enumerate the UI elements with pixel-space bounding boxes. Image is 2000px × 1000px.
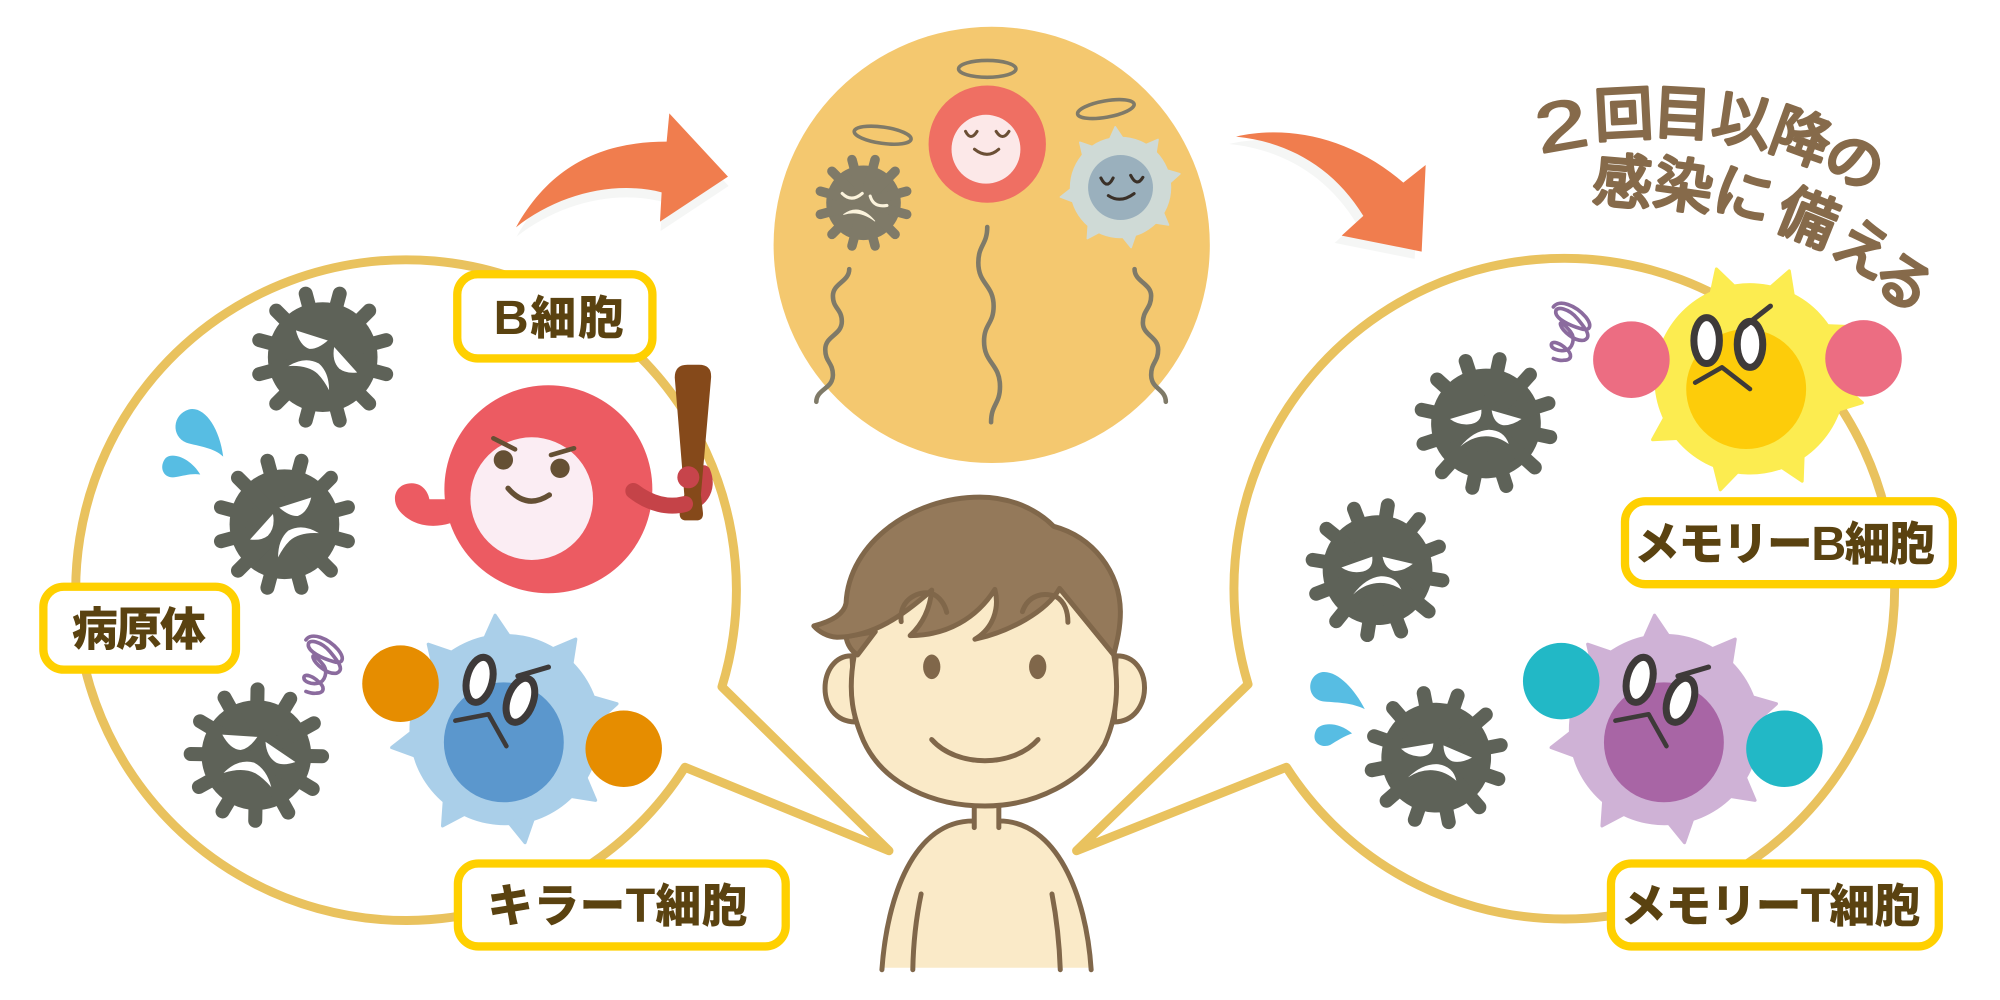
eyes <box>494 450 570 478</box>
curved title: 2 <box>1529 84 1594 168</box>
face <box>1694 306 1770 389</box>
ghost tails <box>816 227 1166 422</box>
nucleus <box>1686 329 1806 449</box>
curved title <box>1529 80 1945 326</box>
label: B cell <box>457 274 652 358</box>
virus 2 <box>1308 500 1447 640</box>
left speech bubble <box>76 260 889 921</box>
nucleus <box>1604 682 1724 802</box>
B cell right arm and hand <box>633 466 699 506</box>
curved title: に <box>1707 157 1780 235</box>
ghost virus <box>820 160 907 246</box>
right arrow <box>1229 132 1426 259</box>
curved title: え <box>1821 207 1905 292</box>
bat <box>675 365 711 520</box>
ghost T cell <box>1059 126 1181 249</box>
mouth <box>932 740 1038 761</box>
label: memory T cell <box>1611 864 1939 946</box>
curved title: 感 <box>1590 148 1654 218</box>
memory T cell character <box>1523 614 1823 845</box>
virus 2 <box>221 461 348 588</box>
body <box>444 385 652 593</box>
right speech bubble <box>1077 258 1895 919</box>
pathogen viruses, left <box>179 294 386 832</box>
left arrow <box>516 113 729 237</box>
label: memory B cell <box>1625 501 1953 584</box>
sweat drops, right <box>1310 672 1365 746</box>
halo: left <box>853 123 912 147</box>
label: pathogen <box>43 587 236 670</box>
cell body <box>1549 614 1779 845</box>
sweat drops, left <box>162 409 223 477</box>
face <box>455 654 548 746</box>
curved title: 降 <box>1762 98 1839 179</box>
ears <box>825 656 1145 722</box>
eyes <box>923 655 1046 679</box>
fists <box>1593 320 1902 398</box>
virus 1 <box>259 294 386 421</box>
killer T cell character <box>362 614 662 845</box>
nucleus <box>444 682 564 802</box>
virus 3 <box>179 678 333 832</box>
brows and smile <box>493 438 574 455</box>
boy character <box>814 497 1145 970</box>
label: memory T cell: メモリーT細胞 <box>1621 879 1920 933</box>
curved title: 以 <box>1708 85 1777 159</box>
curved title: の <box>1814 121 1895 205</box>
curved title: 染 <box>1650 151 1717 223</box>
virus 1 <box>1419 357 1553 490</box>
fists <box>1523 643 1823 787</box>
B cell character <box>395 385 706 593</box>
face <box>851 588 1117 806</box>
hair <box>814 497 1120 655</box>
label: memory B cell: メモリーB細胞 <box>1634 517 1935 571</box>
eyebrows <box>901 593 1068 622</box>
face <box>470 437 593 560</box>
curved title: 備 <box>1768 178 1846 260</box>
halo: right <box>1076 96 1136 122</box>
body <box>882 801 1091 970</box>
ghost B cell <box>929 85 1046 203</box>
label: killer T cell <box>458 864 786 946</box>
dizzy squiggle, left <box>304 636 342 693</box>
curved title: 回 <box>1593 82 1655 150</box>
center circle: defeated cells <box>774 27 1210 463</box>
arm behind bat <box>683 472 706 506</box>
left arm <box>395 483 450 526</box>
label: killer T cell: キラーT細胞 <box>487 879 748 933</box>
label: B cell: B細胞 <box>494 291 624 345</box>
dizzy squiggle, right <box>1551 303 1590 360</box>
fists <box>362 645 662 787</box>
curved title: 目 <box>1651 80 1713 148</box>
pathogen viruses, right <box>1308 357 1553 825</box>
halo: middle <box>959 60 1016 77</box>
cell body <box>390 614 620 845</box>
label: pathogen: 病原体 <box>72 603 206 655</box>
cell body <box>1597 225 1903 532</box>
virus 3 <box>1369 690 1504 825</box>
curved title: る <box>1860 239 1945 326</box>
memory B cell character <box>1593 225 1903 532</box>
face <box>1615 654 1709 746</box>
mouth <box>508 488 549 501</box>
